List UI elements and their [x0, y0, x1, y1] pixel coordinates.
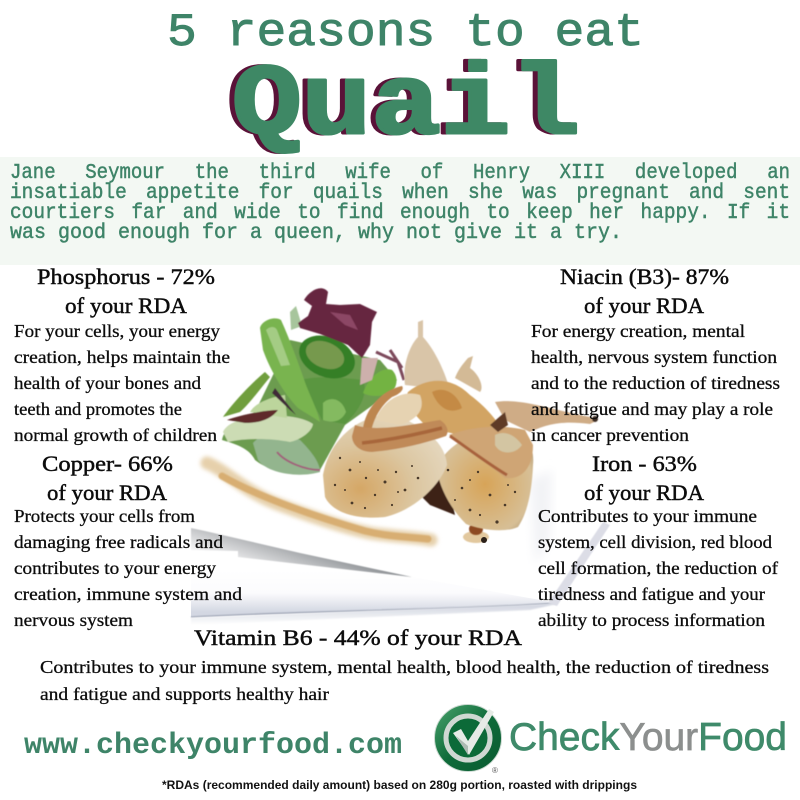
- website url: www.checkyourfood.com: [24, 729, 402, 763]
- nutrient: Niacin: For energy creation, mental: [531, 321, 745, 341]
- nutrient: Copper: of your RDA: [47, 480, 167, 505]
- intro panel: was good enough for a queen, why not give it a try.: [10, 222, 622, 245]
- nutrient: Niacin: health, nervous system function: [531, 347, 777, 367]
- plate shadow: [191, 470, 610, 625]
- photo: quail on plate with salad: [191, 288, 610, 625]
- footnote: *RDAs (recommended daily amount) based on 280g portion, roasted with drippings: [162, 778, 637, 792]
- nutrient: Iron: of your RDA: [584, 480, 704, 505]
- nutrient: Copper: nervous system: [14, 610, 133, 630]
- nutrient: Copper: damaging free radicals and: [14, 532, 223, 552]
- nutrient: Niacin: in cancer prevention: [531, 425, 689, 445]
- nutrient: Vitamin B6: Vitamin B6 - 44% of your RDA: [194, 625, 522, 650]
- nutrient: Copper: creation, immune system and: [14, 584, 242, 604]
- wordmark: CheckYourFood: [509, 716, 787, 759]
- nutrient: Iron: ability to process information: [538, 610, 765, 630]
- nutrient: Phosphorus: For your cells, your energy: [14, 321, 220, 341]
- nutrient: Copper: Copper- 66%: [42, 451, 173, 476]
- nutrient: Vitamin B6: [40, 625, 769, 704]
- nutrient: Copper: [14, 451, 242, 630]
- salad: [222, 288, 404, 475]
- title: 5 reasons to eat: 5 reasons to eat: [167, 7, 644, 59]
- logo: CheckYourFood: [434, 704, 787, 775]
- nutrient: Niacin: of your RDA: [584, 293, 704, 318]
- nutrient: Vitamin B6: and fatigue and supports healthy hair: [40, 684, 329, 704]
- nutrient: Phosphorus: health of your bones and: [14, 373, 201, 393]
- nutrient: Vitamin B6: Contributes to your immune system, mental health, blood health, the reduction of tiredness: [40, 657, 769, 677]
- nutrient: Copper: Protects your cells from: [14, 506, 195, 526]
- nutrient: Iron: cell formation, the reduction of: [538, 558, 778, 578]
- intro panel: [0, 157, 800, 265]
- nutrient: Phosphorus: Phosphorus - 72%: [37, 264, 215, 289]
- icon: check mark badge: ®: [492, 766, 498, 775]
- nutrient: Niacin: and to the reduction of tiredness: [531, 373, 780, 393]
- nutrient: Iron: Iron - 63%: [592, 451, 697, 476]
- title: Quail with shadow: Quail: [232, 51, 580, 164]
- nutrient: Iron: tiredness and fatigue and your: [538, 584, 765, 604]
- nutrient: Niacin: and fatigue and may play a role: [531, 399, 773, 419]
- nutrient: Phosphorus: creation, helps maintain the: [14, 347, 230, 367]
- nutrient: Iron: system, cell division, red blood: [538, 532, 772, 552]
- nutrient: Iron: Contributes to your immune: [538, 506, 757, 526]
- icon: check mark badge: [434, 704, 502, 775]
- quail body: [323, 320, 598, 530]
- nutrient: Copper: contributes to your energy: [14, 558, 216, 578]
- nutrient: Niacin: Niacin (B3)- 87%: [560, 264, 729, 289]
- nutrient: Niacin: [531, 264, 780, 445]
- pepper: [334, 457, 516, 524]
- sauce: [207, 463, 489, 543]
- nutrient: Phosphorus: [14, 264, 230, 445]
- nutrient: Iron: [538, 451, 778, 630]
- nutrient: Phosphorus: of your RDA: [65, 293, 187, 318]
- title: Quail with shadow: Quail: [227, 51, 575, 164]
- nutrient: Phosphorus: teeth and promotes the: [14, 399, 182, 419]
- nutrient: Phosphorus: normal growth of children: [14, 425, 217, 445]
